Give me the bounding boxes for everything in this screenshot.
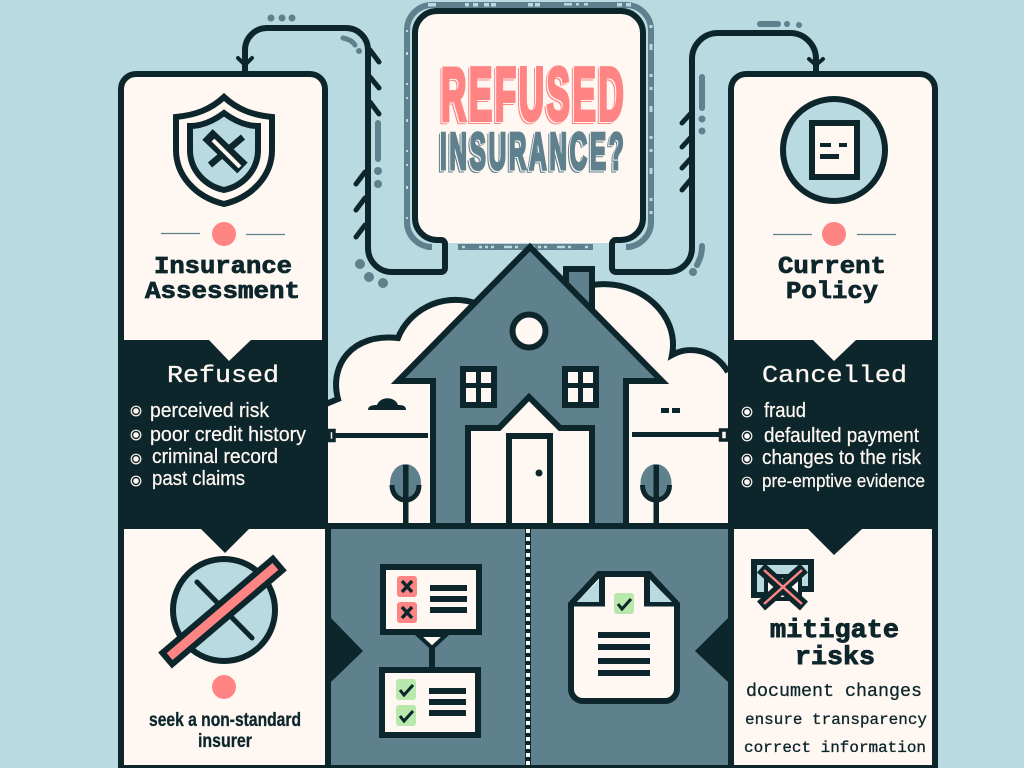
icon: clipboard document [571,574,677,701]
text: mitigation actions [744,682,927,757]
heading: refused: Refused [167,363,279,390]
illustration: house scene [326,247,728,529]
divider with coral dot [773,222,896,246]
porch [468,397,592,526]
list: cancelled reasons: defaulted payment [764,425,919,447]
text: seek a non-standard insurer: seek a non-standard [149,710,301,731]
door [509,436,550,526]
heading: insurance assessment: Insurance [154,254,292,281]
cloud: left [326,300,533,526]
list: cancelled reasons: pre-emptive evidence [762,471,925,491]
small dashes [661,408,680,413]
panel: centre bottom [325,529,728,768]
panel: seek insurer [124,529,325,765]
connector: title box to both cards [245,11,816,272]
list: refused reasons [131,400,306,490]
cloud: right [525,284,728,526]
fence rail: left [329,430,428,440]
panel: left card [118,71,328,768]
heading: mitigate risks [770,615,899,672]
heading: current policy: Current [778,254,886,281]
icon: checklist before and after [382,567,479,735]
divider: dotted line [525,529,531,768]
heading: current policy: Policy [786,279,878,306]
heading: current policy [778,254,886,306]
title box background [418,14,640,243]
divider with coral dot [161,222,285,246]
tree: right [640,464,672,525]
list: cancelled reasons [742,400,925,491]
chimney [566,269,592,320]
arrow: right pointer [695,618,728,682]
panel: mitigate risks [734,529,932,765]
text: mitigation actions: ensure transparency [745,711,927,729]
text: mitigation actions: document changes [746,682,922,702]
heading: insurance assessment: Assessment [145,279,300,306]
title frame: dashed outer border [407,3,651,250]
house body [398,247,662,526]
window: right [565,369,596,405]
list: cancelled reasons: fraud [764,400,806,422]
list: refused reasons: perceived risk [150,400,270,422]
title line 2: INSURANCE? [440,122,624,181]
text: mitigation actions: correct information [744,739,926,757]
arrow: left pointer [331,618,363,682]
heading: insurance assessment [145,254,300,306]
panel: right card [728,71,938,768]
arrow heads [238,58,823,65]
ground line [328,523,728,529]
heading: cancelled: Cancelled [762,363,907,390]
text: seek a non-standard insurer [149,710,301,752]
icon: crossed out envelope [754,562,811,606]
window: left [463,369,494,405]
icon: document in circle [783,99,885,201]
list: cancelled reasons: changes to the risk [762,447,922,469]
text: seek a non-standard insurer: insurer [198,731,253,752]
title [440,53,624,181]
list: refused reasons: past claims [152,468,245,490]
list: refused reasons: poor credit history [150,424,306,446]
decoration: right connector marks [682,21,802,276]
fence rail: right [632,430,728,440]
heading: mitigate risks: risks [795,642,875,672]
icon: crossed out circle [165,559,280,661]
decoration: left connector marks [268,14,388,288]
tree: left [390,464,421,525]
coral dot [212,675,236,699]
icon: shield with cross [176,97,272,204]
round window [512,314,546,348]
heading: mitigate risks: mitigate [770,615,899,645]
title line 1: REFUSED [441,53,624,137]
small hill mark [368,398,406,410]
list: refused reasons: criminal record [152,446,278,468]
